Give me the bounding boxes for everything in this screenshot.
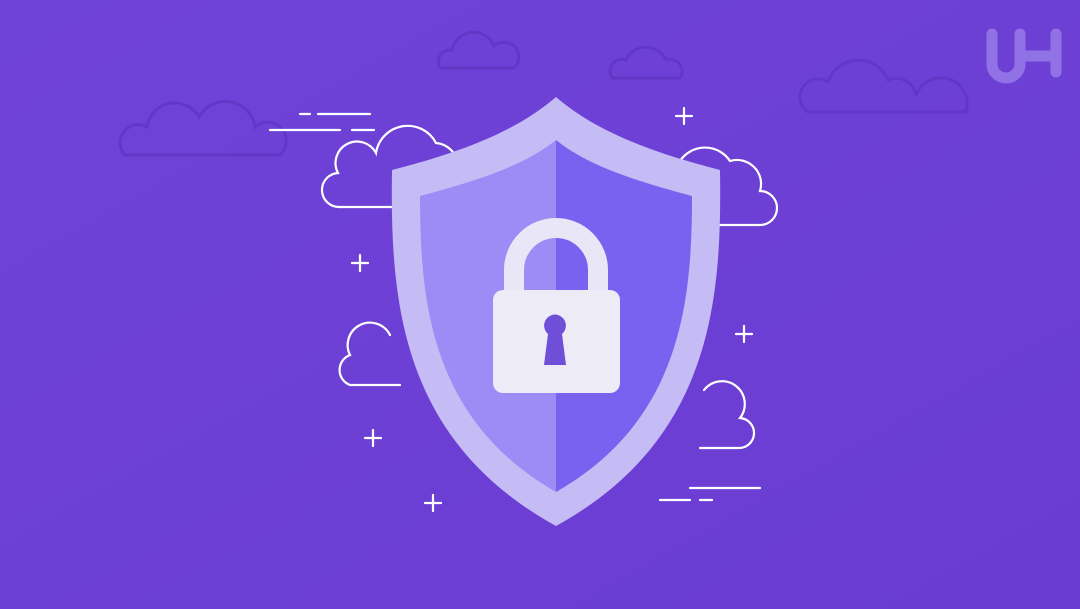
logo: UH <box>992 34 1056 78</box>
decorative white clouds and lines <box>270 108 777 511</box>
shield <box>392 97 720 526</box>
background faint clouds <box>120 32 967 155</box>
lock <box>493 228 620 393</box>
